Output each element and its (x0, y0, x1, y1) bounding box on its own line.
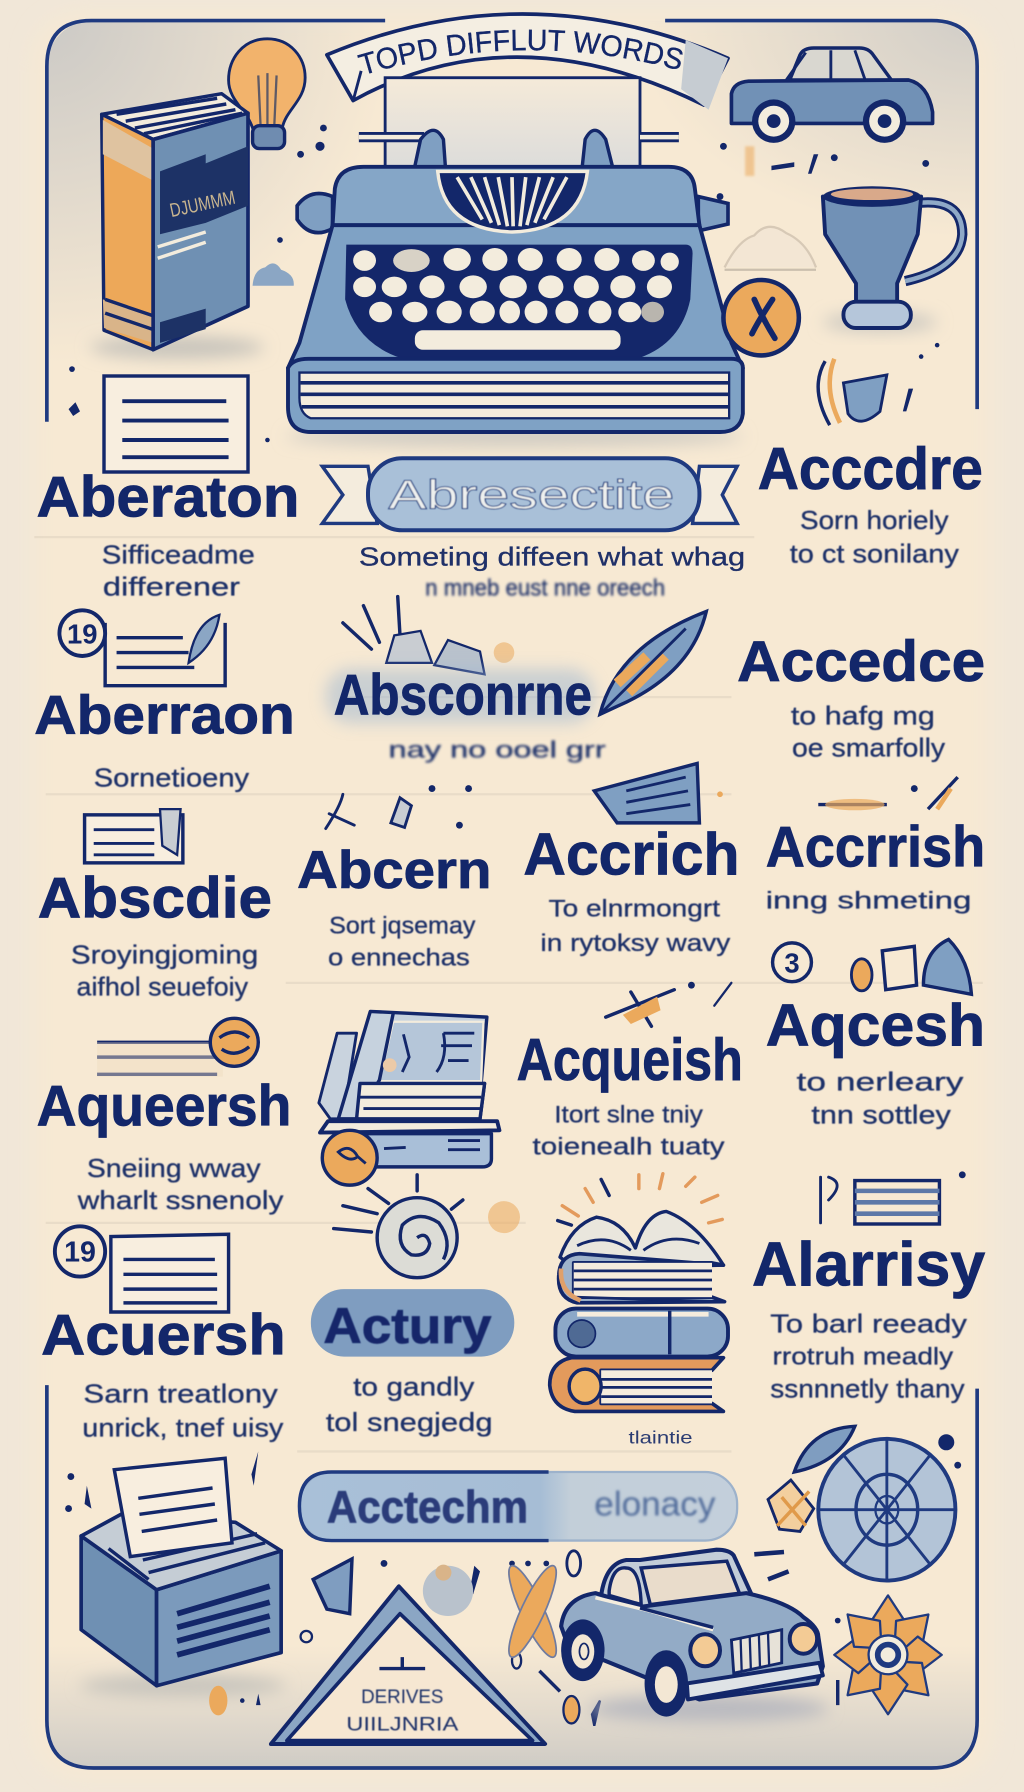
word entry: Actury: Actury (323, 1297, 491, 1354)
word entry: Alarrrisy (752, 1231, 985, 1404)
word entry: Accedce: to hafg mg (791, 701, 935, 731)
caption: books: tlaintie (629, 1427, 693, 1447)
word entry: Alarrrisy: To barl reeady (770, 1309, 968, 1339)
word entry: Acqueish: Itort slne tniy (554, 1101, 703, 1128)
icon: small note row 3 (85, 809, 183, 863)
word entry: Absconrne: nay no ooel grr (389, 737, 606, 763)
definition: Abresectite: Someting diffeen what whag (359, 542, 745, 572)
word entry: Accrich: Accrich (523, 820, 739, 887)
icon: orange X (501, 1561, 564, 1662)
word entry: Acuersh: unrick, tnef uisy (82, 1413, 284, 1443)
icon: stack of books (550, 1211, 728, 1411)
word entry: Accrich: To elnrmongrt (549, 896, 720, 923)
icon: note row 5 right (821, 1171, 966, 1224)
icon: paper box (80, 1458, 286, 1697)
icon: large book (90, 94, 264, 359)
badge: 19 lower (55, 1226, 105, 1277)
word entry: Acccdre: Sorn horiely (800, 505, 949, 535)
word entry: Accrrish: Accrrish (766, 815, 985, 879)
badge: 3: 3 (784, 948, 800, 979)
word entry: Acuersh: Sarn treatlony (83, 1378, 279, 1408)
icon: sprigs row 3 (326, 785, 472, 829)
icon: orange button (723, 280, 799, 355)
icon: compass wheel (818, 1439, 955, 1581)
icon: light bulb (229, 39, 305, 149)
badge: 19 upper (59, 610, 105, 656)
banner: title ribbon (324, 12, 730, 110)
icon: small shapes row 4 right (851, 939, 971, 994)
word entry: Actury (311, 1289, 514, 1437)
word entry: Accedce: oe smarfolly (792, 733, 946, 763)
icon: typewriter (286, 78, 743, 447)
banner: Abresectite (322, 458, 737, 530)
word entry: Actury: to gandly (353, 1371, 475, 1401)
word entry: Actury: tol snegjedg (326, 1407, 493, 1437)
word entry: Aqueersh: wharlt ssnenoly (77, 1185, 284, 1215)
word entry: Absconrne: Absconrne (334, 663, 592, 727)
pill: Acctechm elonacy (299, 1472, 737, 1541)
word entry: Abscdie (38, 867, 272, 1001)
word entry: Acqueish (517, 1026, 743, 1160)
word entry: Acuersh: Acuersh (41, 1303, 286, 1367)
word entry: Aqueersh: Sneiing wway (87, 1153, 261, 1183)
icon: bottom car (561, 1550, 829, 1722)
word entry: Acccdre: Acccdre (758, 435, 983, 502)
word entry: Abcern: Sort jqsemay (329, 913, 475, 940)
banner: Abresectite: Abresectite (389, 472, 674, 518)
icon: note sheet top left (104, 376, 248, 472)
word entry: Acuersh (41, 1303, 286, 1443)
word entry: Aberraon (34, 684, 295, 792)
icon: leaf and orange bundle (768, 1426, 855, 1531)
word entry: Aqcesh: Aqcesh (766, 992, 985, 1059)
badge: 3 (773, 943, 811, 982)
pill: Acctechm elonacy: Acctechm (327, 1481, 528, 1532)
icon: triangle sign (271, 1586, 545, 1744)
icon: triangle sign: UIILJNRIA (346, 1713, 458, 1735)
word entry: Aqcesh: tnn sottley (811, 1099, 952, 1129)
rays above books (558, 1174, 722, 1225)
word entry: Abscdie: Sroyingjoming (71, 939, 258, 969)
icon: spiral sun (334, 1175, 520, 1278)
word entry: Aqcesh: to nerleary (797, 1066, 965, 1096)
word entry: Acqueish: toienealh tuaty (533, 1133, 725, 1160)
word entry: Acccdre (758, 435, 983, 568)
word entry: Absconrne (326, 663, 606, 763)
icon: note with orange dial (97, 1018, 258, 1077)
word entry: Abcern: o ennechas (328, 945, 470, 972)
icon: quill pen (600, 611, 706, 714)
icon: leaf accent upper right (818, 359, 887, 425)
icon: small gem and bag (313, 1559, 473, 1616)
word entry: Aqueersh (37, 1075, 291, 1215)
word entry: Abcern (297, 841, 491, 972)
word entry: Aberaton: Aberaton (37, 466, 299, 530)
icon: books and cart (319, 1011, 499, 1185)
word entry: Aqueersh: Aqueersh (37, 1075, 291, 1139)
word entry: Aberaton: differener (103, 571, 240, 601)
paper in typewriter (385, 78, 640, 169)
icon: open note row 3 (594, 763, 723, 823)
word entry: Acqueish: Acqueish (517, 1026, 743, 1093)
icon: top car (731, 48, 933, 143)
word entry: Alarrrisy: Alarrisy (752, 1231, 985, 1300)
word entry: Abcern: Abcern (297, 841, 491, 900)
icon: note with quill row 2 (105, 615, 225, 686)
word entry: Accedce: Accedce (737, 630, 985, 694)
icon: rays and stones row 2 (343, 597, 514, 674)
icon: large book: DJUMMM (168, 187, 237, 222)
word entry: Accrich: in rytoksy wavy (541, 930, 730, 957)
title: TOPD DIFFLUT WORDS (357, 30, 683, 74)
word entry: Abscdie: aifhol seuefoiy (77, 971, 249, 1001)
icon: small cloud (253, 263, 294, 286)
word entry: Accrich (523, 820, 739, 957)
icon: cup (823, 186, 962, 333)
word entry: Alarrrisy: rrotruh meadly (773, 1344, 953, 1371)
icon: pencil accent (606, 982, 731, 1026)
word entry: Accrrish (766, 815, 985, 915)
definition: Abresectite (359, 542, 745, 600)
scattered marks top (69, 125, 939, 442)
scattered marks bottom (65, 1434, 961, 1726)
icon: cloud (725, 227, 816, 270)
word entry: Accedce (737, 630, 985, 763)
word entry: Aberraon: Sornetioeny (94, 762, 250, 792)
word entry: Alarrrisy: ssnnnetly thany (770, 1374, 965, 1404)
pill: Acctechm elonacy: elonacy (594, 1485, 716, 1523)
word entry: Aqcesh (766, 992, 985, 1129)
badge: 19 upper: 19 (67, 618, 98, 649)
icon: note row 5 (111, 1234, 229, 1312)
word entry: Aberraon: Aberraon (34, 684, 295, 746)
icon: triangle sign: DERIVES (361, 1686, 443, 1708)
icon: pencil marks row 3 right (818, 777, 958, 810)
word entry: Aberaton (37, 466, 299, 601)
word entry: Abscdie: Abscdie (38, 867, 272, 931)
word entry: Acccdre: to ct sonilany (790, 538, 960, 568)
badge: 19 lower: 19 (64, 1237, 96, 1269)
icon: flower (834, 1595, 942, 1714)
word entry: Aberaton: Sifficeadme (102, 539, 255, 569)
word entry: Accrrish: inng shmeting (766, 888, 971, 915)
definition: Abresectite: n mneb eust nne oreech (425, 574, 665, 600)
